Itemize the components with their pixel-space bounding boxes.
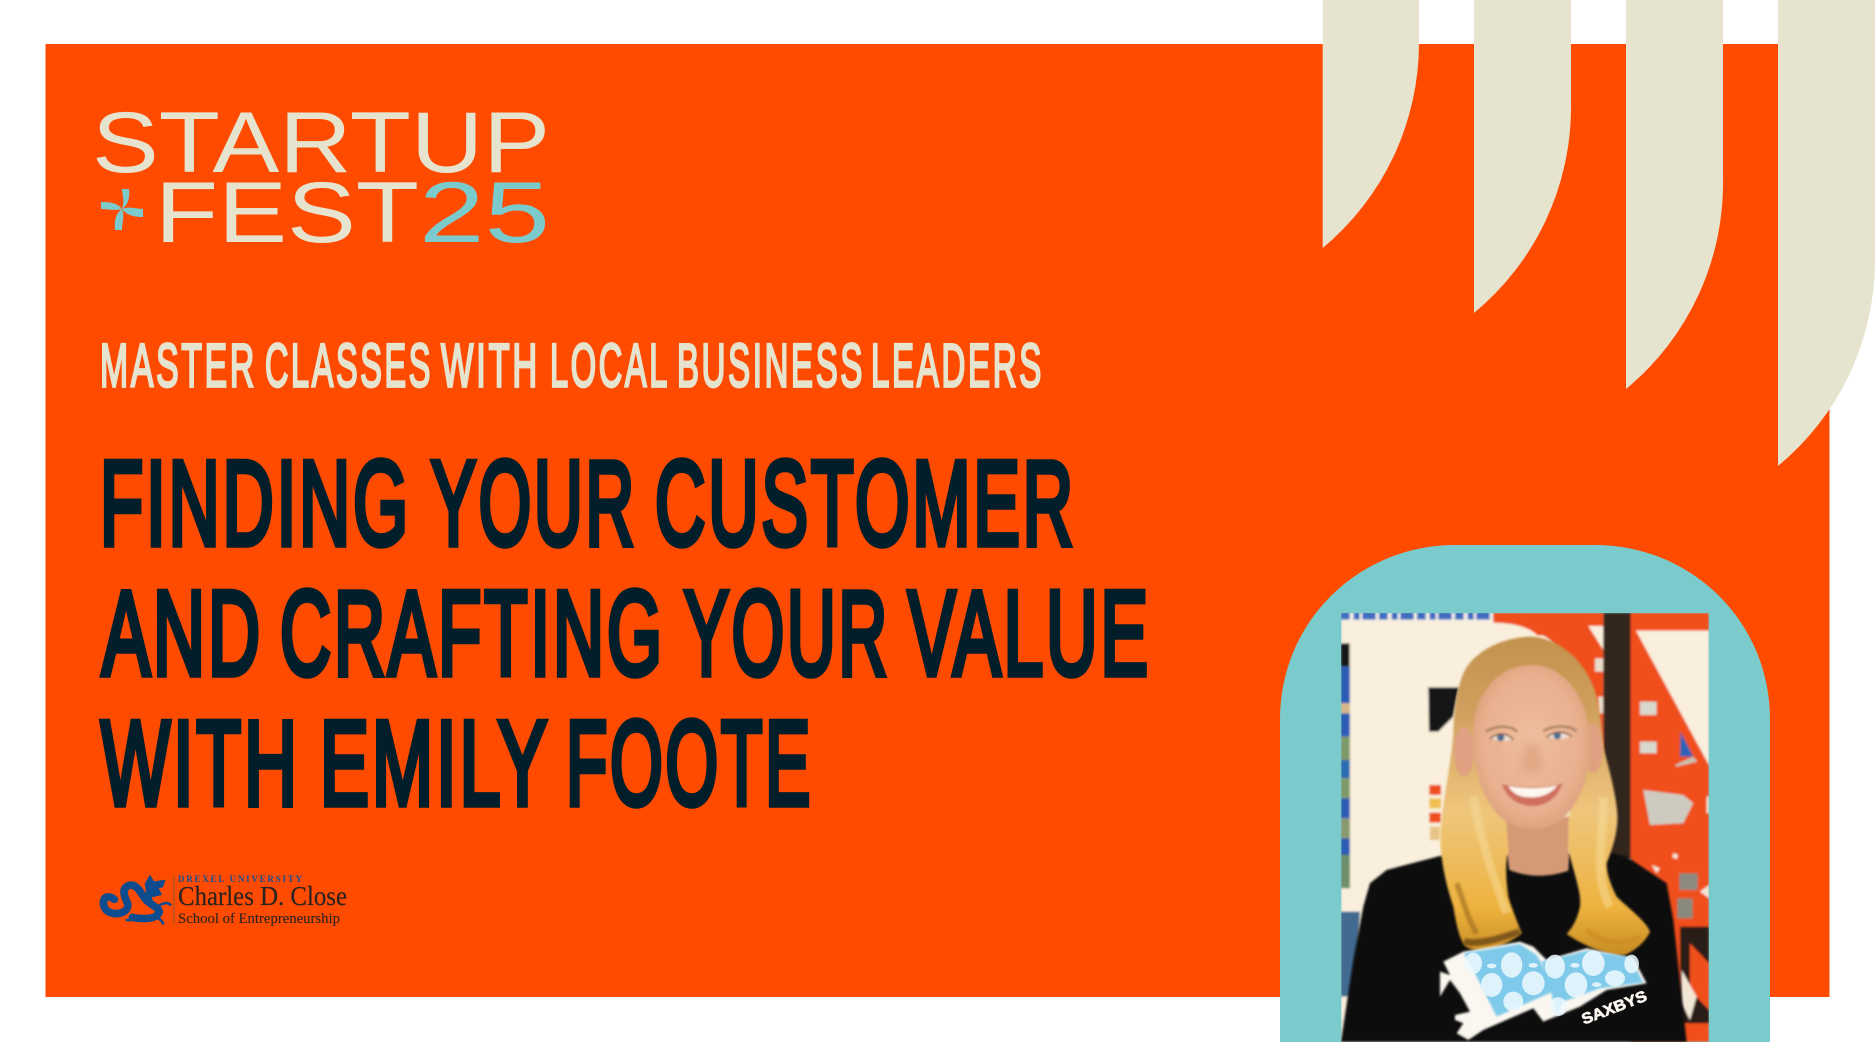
subtitle: MASTER — [100, 332, 257, 400]
logo: Drexel Close School: School of Entrepreneurship — [178, 911, 340, 927]
hair — [1440, 637, 1650, 955]
shirt — [1341, 853, 1687, 1042]
teal arch — [1280, 545, 1770, 1042]
title: AND — [102, 566, 263, 700]
logo: Drexel Close School — [103, 874, 347, 927]
title: WITH — [101, 696, 300, 830]
subtitle: CLASSES — [265, 332, 433, 400]
shirt graphic: Saxbys banner — [1440, 942, 1650, 1040]
icon: Drexel dragon — [103, 875, 170, 923]
speaker photo — [1341, 613, 1709, 1042]
title: VALUE — [908, 566, 1151, 700]
subtitle: LOCAL — [550, 332, 670, 400]
photo backdrop — [1341, 613, 1709, 1042]
logo: Startup Fest 25: 25 — [419, 165, 550, 261]
title — [100, 436, 1151, 830]
title: EMILY — [320, 696, 550, 830]
title: YOUR — [684, 566, 890, 700]
hair shading — [1457, 797, 1640, 943]
logo: Drexel Close School: Charles D. Close — [178, 881, 347, 911]
subtitle: WITH — [441, 332, 540, 400]
logo: Drexel Close School: DREXEL UNIVERSITY — [178, 874, 302, 884]
neck — [1502, 817, 1572, 876]
logo: Startup Fest 25: FEST — [155, 165, 419, 261]
subtitle — [100, 332, 1044, 400]
logo: Startup Fest 25 — [92, 95, 550, 261]
decorative blades — [1323, 0, 1875, 466]
subtitle: BUSINESS — [677, 332, 865, 400]
title: FINDING — [100, 436, 411, 570]
logo: Startup Fest 25: STARTUP — [92, 95, 550, 191]
title: CUSTOMER — [655, 436, 1076, 570]
balloon pattern — [1465, 951, 1639, 1016]
title: CRAFTING — [280, 566, 665, 700]
shirt graphic: Saxbys banner: SAXBYS — [1579, 988, 1650, 1028]
icon: pinwheel star — [101, 189, 143, 230]
face — [1454, 665, 1603, 829]
title: YOUR — [431, 436, 637, 570]
title: FOOTE — [566, 696, 813, 830]
subtitle: LEADERS — [871, 332, 1044, 400]
